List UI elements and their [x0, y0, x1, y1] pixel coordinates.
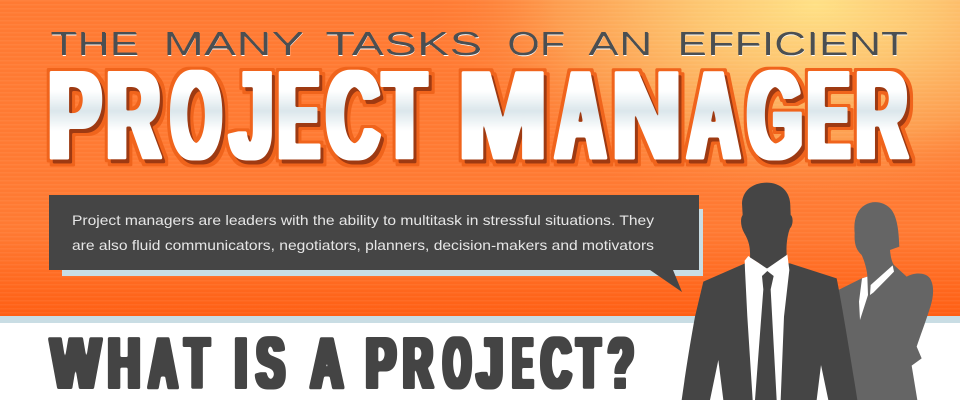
- bubble body with tail: [49, 195, 699, 292]
- main heading: project manager: A: [556, 46, 605, 186]
- title line: the many tasks of an efficient: OF: [508, 26, 566, 63]
- title line: the many tasks of an efficient: [50, 25, 909, 63]
- bubble text: Project managers are leaders with the ability to multitask in stressful situations. They: [72, 212, 654, 228]
- title line: the many tasks of an efficient: TASKS: [326, 26, 483, 63]
- section heading: what is a project: [51, 323, 634, 400]
- main heading: project manager: E: [808, 46, 849, 186]
- bubble text: [72, 212, 654, 253]
- speech bubble: [49, 195, 703, 292]
- woman's shirt and collar: [859, 265, 894, 320]
- title line: the many tasks of an efficient: MANY: [163, 25, 304, 62]
- main heading: project manager: R: [856, 46, 907, 186]
- man's jacket: [682, 263, 857, 400]
- man's tie: [755, 271, 777, 400]
- main heading: project manager: P: [48, 46, 101, 186]
- main heading: project manager: R: [107, 46, 160, 186]
- bubble shadow: [62, 209, 703, 276]
- silhouette: man: [682, 183, 857, 400]
- man's head: [741, 183, 793, 268]
- title line: the many tasks of an efficient: AN: [588, 25, 652, 62]
- title line: the many tasks of an efficient: THE: [50, 25, 139, 62]
- bubble text: are also fluid communicators, negotiators, planners, decision-makers and motivators: [72, 237, 654, 253]
- title line: the many tasks of an efficient: AN: [589, 26, 653, 63]
- title line: the many tasks of an efficient: MANY: [164, 26, 305, 63]
- title line: the many tasks of an efficient: EFFICIENT: [677, 25, 908, 62]
- main heading: project manager: J: [230, 46, 273, 186]
- main heading: project manager: N: [612, 46, 681, 186]
- title line: the many tasks of an efficient: TASKS: [325, 25, 482, 62]
- main heading: project manager: M: [459, 46, 547, 186]
- main heading: project manager: A: [688, 46, 739, 186]
- main heading: project manager: [48, 46, 907, 186]
- main heading: project manager: C: [327, 46, 379, 186]
- title line: the many tasks of an efficient: OF: [507, 25, 565, 62]
- title line: the many tasks of an efficient: THE: [51, 26, 140, 63]
- main heading: project manager: T: [384, 46, 425, 186]
- silhouette: woman: [838, 202, 933, 400]
- light blue divider band: [0, 316, 960, 323]
- main heading: project manager: E: [279, 46, 319, 186]
- man's shirt: [745, 254, 789, 400]
- main heading: project manager: G: [748, 46, 802, 186]
- main heading: project manager: O: [171, 46, 221, 186]
- orange header background: [0, 0, 960, 316]
- title line: the many tasks of an efficient: EFFICIENT: [678, 26, 909, 63]
